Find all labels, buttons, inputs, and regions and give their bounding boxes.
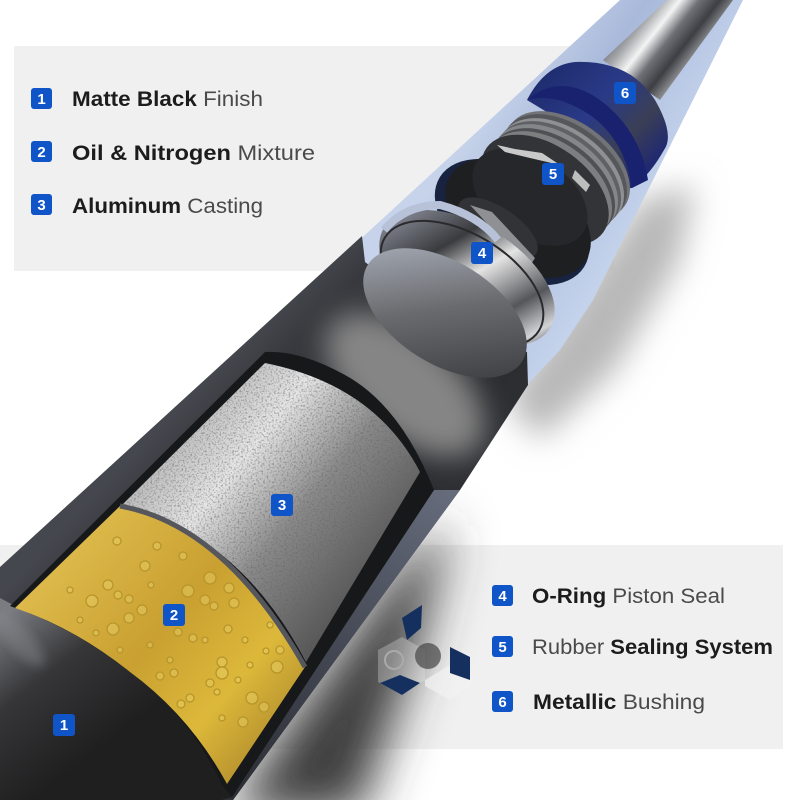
legend: bottom list: [492, 585, 773, 714]
tube cast shadow: [225, 520, 450, 800]
oil and nitrogen section: [15, 506, 305, 784]
legend item 2: 2: [37, 144, 46, 161]
piston spindle: [470, 205, 535, 272]
watermark logo: [378, 605, 472, 700]
legend item 5: Rubber Sealing System: [532, 636, 773, 659]
aluminum casting section: [123, 363, 420, 662]
dark tube body: [0, 236, 528, 800]
badge 5 on seal: 5: [549, 166, 557, 183]
badge 5 on seal: [542, 163, 564, 185]
tube upper body highlight: [310, 298, 500, 474]
badge 6 on bushing: 6: [621, 85, 629, 102]
legend item 6: 6: [498, 694, 507, 711]
badge 6 on bushing: [614, 82, 636, 104]
legend item 1: Matte Black Finish: [72, 88, 263, 111]
badge 4 on O-ring: 4: [478, 245, 487, 262]
glass cylinder sleeve: [340, 0, 743, 385]
tube lower dark section: [0, 598, 232, 800]
tube right edge band: [228, 490, 460, 800]
cutaway black frame: [10, 352, 434, 797]
badge 4 on O-ring: [471, 242, 493, 264]
chrome piston rod: [603, 0, 733, 100]
panel: bottom legend background: [0, 545, 783, 749]
badge 2 on oil: 2: [170, 607, 178, 624]
legend item 3: 3: [37, 197, 46, 214]
legend item 4: 4: [498, 588, 507, 605]
badge 3 on casting: [271, 494, 293, 516]
piston face: [341, 222, 549, 404]
bubbles: [66, 536, 284, 728]
metallic bushing: [527, 62, 668, 190]
legend: top list: [31, 88, 315, 218]
rubber sealing black disk: [412, 128, 612, 311]
separator ring between oil and casting: [120, 506, 305, 667]
legend item 1: 1: [37, 91, 46, 108]
legend item 6: Metallic Bushing: [533, 691, 705, 714]
soft highlight on lower tube: [0, 607, 52, 673]
piston cast shadows: [505, 185, 695, 440]
rubber sealing ribbed ring: [461, 89, 650, 268]
legend item 5: 5: [498, 639, 507, 656]
panel: top legend background: [14, 46, 614, 271]
badge 1 on tube: 1: [60, 717, 68, 734]
badge 3 on casting: 3: [278, 497, 286, 514]
legend item 4: O-Ring Piston Seal: [532, 585, 725, 608]
O-ring piston silver rim: [356, 182, 578, 374]
badge 2 on oil: [163, 604, 185, 626]
badge 1 on tube: [53, 714, 75, 736]
legend item 2: Oil & Nitrogen Mixture: [72, 142, 315, 165]
legend item 3: Aluminum Casting: [72, 195, 263, 218]
